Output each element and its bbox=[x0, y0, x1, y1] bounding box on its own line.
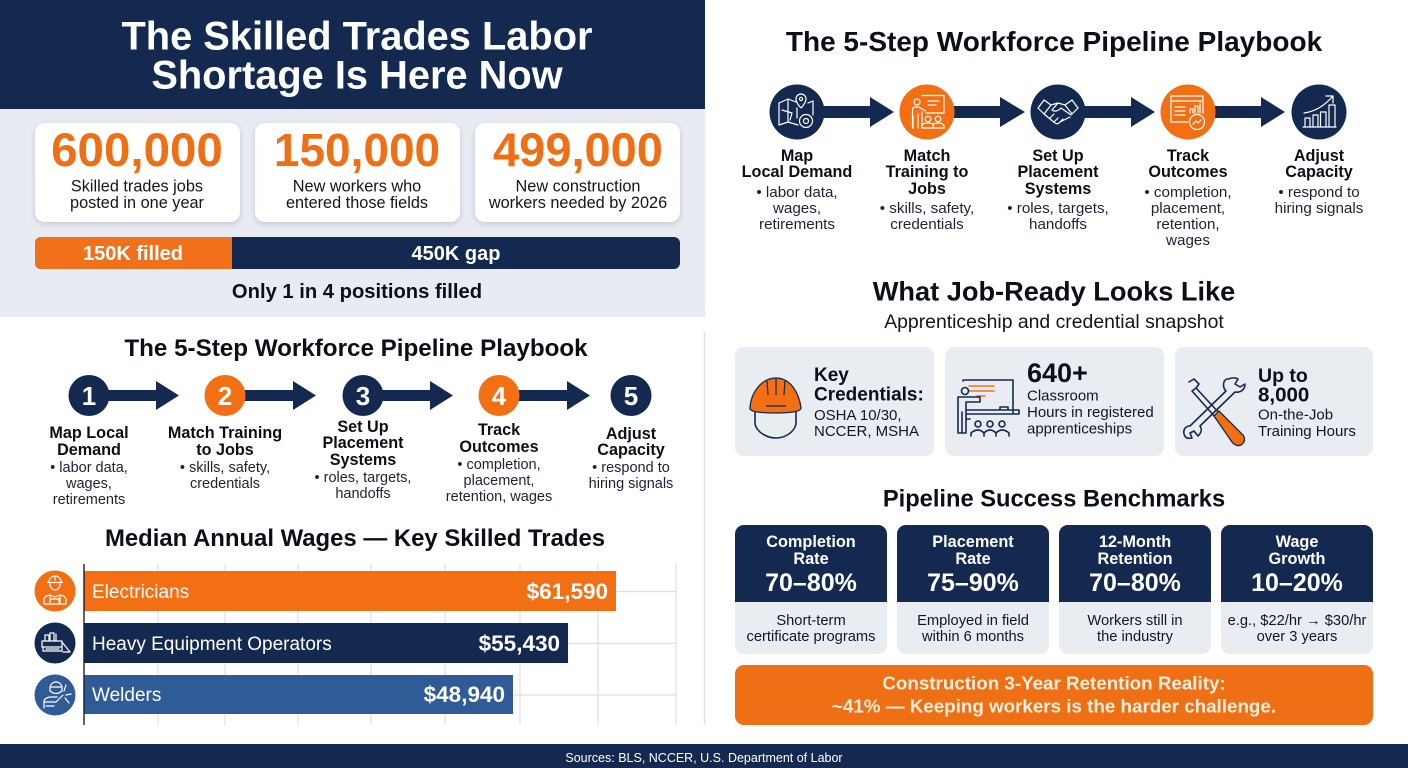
step 1: map local demand bbox=[742, 84, 852, 233]
step 3 bbox=[315, 375, 411, 502]
caption: positions filled: Only 1 in 4 positions filled bbox=[232, 281, 482, 303]
benchmark: 12-month retention: Workers still in bbox=[1087, 613, 1183, 629]
stat card: jobs posted: Skilled trades jobs bbox=[71, 178, 203, 196]
arrow 3 bbox=[379, 381, 453, 410]
arrow 1 bbox=[105, 381, 179, 410]
stat card: new workers: entered those fields bbox=[286, 194, 428, 212]
card: classroom hours: 640+ bbox=[1027, 358, 1088, 388]
step 4: Track bbox=[478, 421, 521, 439]
step 3: Placement bbox=[323, 434, 404, 452]
step 5: 5 bbox=[624, 381, 638, 411]
arrow 1 bbox=[820, 97, 894, 127]
step 5: adjust capacity: Capacity bbox=[1285, 163, 1353, 181]
step 3: set up placement systems bbox=[1007, 84, 1109, 233]
step 4: • completion, bbox=[457, 457, 541, 473]
progress bar: filled vs gap bbox=[35, 237, 680, 269]
benchmark: completion rate: 70–80% bbox=[765, 569, 857, 597]
stat card: jobs posted: posted in one year bbox=[70, 194, 205, 212]
step 2: Match Training bbox=[168, 424, 282, 442]
stat card: jobs posted: 600,000 bbox=[51, 124, 223, 177]
card: classroom hours bbox=[945, 347, 1164, 456]
icon: welder bbox=[34, 674, 76, 716]
panel: shortage statistics bbox=[0, 109, 705, 317]
benchmark: wage growth: Growth bbox=[1269, 550, 1325, 568]
benchmark: placement rate: 75–90% bbox=[927, 569, 1019, 597]
benchmark: wage growth: over 3 years bbox=[1257, 629, 1337, 645]
icon: growth chart bbox=[1292, 84, 1346, 140]
benchmark: completion rate: Short-term bbox=[776, 613, 846, 629]
step 1: map local demand: retirements bbox=[759, 216, 835, 233]
bar: electricians: Electricians bbox=[92, 582, 189, 603]
step 2 bbox=[168, 375, 282, 492]
bar: electricians: $61,590 bbox=[527, 579, 608, 604]
title bbox=[121, 14, 593, 98]
step 3: • roles, targets, bbox=[315, 470, 411, 486]
step 1: • labor data, bbox=[50, 460, 128, 476]
step 4: track outcomes: retention, bbox=[1156, 216, 1220, 233]
icon: trainer bbox=[900, 84, 954, 140]
stat card: new workers bbox=[255, 123, 460, 222]
subtitle: job-ready: Apprenticeship and credential snapshot bbox=[884, 311, 1224, 333]
step 3: set up placement systems: Systems bbox=[1025, 180, 1091, 198]
step 4: track outcomes: Outcomes bbox=[1148, 163, 1228, 181]
icon: dashboard bbox=[1160, 84, 1216, 140]
step 4: Outcomes bbox=[459, 438, 539, 456]
benchmark: completion rate: certificate programs bbox=[747, 629, 875, 645]
step 4: track outcomes: placement, bbox=[1151, 200, 1225, 217]
step 2: match training to jobs: • skills, safety, bbox=[880, 200, 974, 217]
benchmark: 12-month retention: 70–80% bbox=[1089, 569, 1181, 597]
card: key credentials: NCCER, MSHA bbox=[814, 423, 919, 440]
stat card: new workers: 150,000 bbox=[274, 124, 440, 176]
card: key credentials bbox=[735, 347, 934, 456]
step 1 bbox=[49, 375, 129, 508]
benchmark: placement rate: Employed in field bbox=[917, 613, 1029, 629]
benchmark: placement rate: Placement bbox=[932, 533, 1014, 551]
bar: welders: $48,940 bbox=[424, 682, 505, 707]
step 5: adjust capacity: hiring signals bbox=[1275, 200, 1364, 217]
step 2: to Jobs bbox=[196, 441, 254, 459]
left playbook steps bbox=[49, 375, 673, 508]
heading: wages chart: Median Annual Wages — Key Skilled Trades bbox=[105, 525, 605, 552]
benchmark: placement rate: within 6 months bbox=[921, 629, 1024, 645]
step 4 bbox=[446, 375, 552, 505]
card: classroom hours: Hours in registered bbox=[1027, 404, 1154, 421]
arrow 3 bbox=[1080, 97, 1155, 127]
progress bar: filled vs gap: 450K gap bbox=[412, 243, 500, 265]
step 2: 2 bbox=[218, 381, 232, 411]
step 1: map local demand: • labor data, bbox=[756, 184, 838, 201]
step 2: match training to jobs: Jobs bbox=[908, 180, 946, 198]
step 2: match training to jobs bbox=[880, 84, 974, 233]
bar: heavy equipment operators: Heavy Equipment Operators bbox=[92, 634, 332, 655]
benchmark: 12-month retention: 12-Month bbox=[1099, 533, 1171, 551]
title: Shortage Is Here Now bbox=[151, 54, 564, 98]
stat card: new workers: New workers who bbox=[293, 178, 421, 196]
step 3: set up placement systems: Placement bbox=[1018, 163, 1099, 181]
arrow 4 bbox=[515, 381, 590, 410]
card: on-the-job training: 8,000 bbox=[1258, 384, 1309, 407]
arrow 4 bbox=[1210, 97, 1285, 127]
step 3: Set Up bbox=[337, 418, 389, 436]
card: on-the-job training: On-the-Job bbox=[1258, 406, 1333, 424]
card: key credentials: Key bbox=[814, 365, 849, 386]
benchmark: completion rate: Rate bbox=[793, 550, 829, 568]
bar: heavy equipment operators: $55,430 bbox=[479, 631, 560, 656]
step 5: adjust capacity: • respond to bbox=[1278, 184, 1360, 201]
benchmark: 12-month retention bbox=[1059, 525, 1211, 654]
stat card: construction workers needed: 499,000 bbox=[493, 123, 663, 176]
icon: classroom bbox=[958, 380, 1019, 436]
step 3: set up placement systems: Set Up bbox=[1032, 147, 1084, 165]
bar: heavy equipment operators bbox=[84, 623, 568, 663]
footer: sources bbox=[0, 744, 1408, 768]
callout: retention reality: ~41% — Keeping workers is the harder challenge. bbox=[832, 696, 1276, 716]
arrow 2 bbox=[950, 97, 1025, 127]
stat card: jobs posted bbox=[35, 123, 240, 222]
step 1: 1 bbox=[82, 381, 96, 411]
icon: handshake bbox=[1030, 84, 1086, 140]
benchmark: 12-month retention: Retention bbox=[1097, 550, 1173, 568]
arrow 2 bbox=[241, 381, 316, 410]
card: on-the-job training: Training Hours bbox=[1258, 423, 1356, 440]
step 3: Systems bbox=[330, 451, 396, 469]
step 2: match training to jobs: credentials bbox=[890, 216, 964, 233]
icon: hard hat head bbox=[750, 378, 801, 438]
step 2: credentials bbox=[190, 476, 260, 492]
benchmark: 12-month retention: the industry bbox=[1097, 629, 1174, 645]
bar chart: median wages bbox=[34, 564, 676, 725]
footer: sources: Sources: BLS, NCCER, U.S. Department of Labor bbox=[565, 751, 843, 765]
step 4: track outcomes: wages bbox=[1165, 232, 1210, 249]
heading: left playbook: The 5-Step Workforce Pipeline Playbook bbox=[124, 335, 588, 362]
right playbook steps bbox=[742, 84, 1364, 249]
progress bar: filled vs gap: 150K filled bbox=[83, 243, 183, 265]
title: The Skilled Trades Labor bbox=[121, 14, 593, 58]
heading: benchmarks: Pipeline Success Benchmarks bbox=[883, 486, 1225, 512]
step 5: adjust capacity bbox=[1275, 84, 1364, 217]
step 1: retirements bbox=[53, 492, 125, 508]
bar: welders bbox=[84, 675, 513, 714]
stat card: construction workers needed: New construction bbox=[516, 178, 640, 196]
icon: wrench and screwdriver bbox=[1184, 378, 1245, 446]
card: on-the-job training bbox=[1175, 347, 1373, 456]
step 4: 4 bbox=[492, 381, 507, 411]
card: classroom hours: Classroom bbox=[1027, 388, 1099, 404]
step 1: map local demand: wages, bbox=[772, 200, 821, 217]
benchmark: placement rate: Rate bbox=[955, 550, 991, 568]
step 1: map local demand: Map bbox=[781, 147, 813, 165]
step 1: map local demand: Local Demand bbox=[742, 163, 852, 181]
benchmark: completion rate bbox=[735, 525, 887, 654]
benchmark: wage growth bbox=[1221, 525, 1373, 654]
step 5 bbox=[589, 375, 673, 492]
benchmark: placement rate bbox=[897, 525, 1049, 654]
step 1: Demand bbox=[57, 441, 121, 459]
step 5: Adjust bbox=[606, 425, 657, 443]
step 5: Capacity bbox=[597, 441, 665, 459]
benchmark: wage growth: Wage bbox=[1276, 533, 1318, 551]
divider bbox=[704, 332, 706, 725]
card: on-the-job training: Up to bbox=[1258, 365, 1308, 387]
step 3: set up placement systems: handoffs bbox=[1029, 216, 1087, 233]
card: key credentials: OSHA 10/30, bbox=[814, 407, 902, 424]
step 1: Map Local bbox=[49, 424, 129, 442]
step 2: • skills, safety, bbox=[180, 460, 270, 476]
card: key credentials: Credentials: bbox=[814, 385, 924, 406]
icon: electrician bbox=[34, 570, 76, 612]
header banner bbox=[0, 0, 705, 109]
step 3: set up placement systems: • roles, targets, bbox=[1007, 200, 1109, 217]
card: classroom hours: apprenticeships bbox=[1027, 420, 1132, 438]
step 3: handoffs bbox=[335, 486, 391, 502]
step 1: wages, bbox=[65, 476, 112, 492]
benchmark: wage growth: e.g., $22/hr → $30/hr bbox=[1228, 613, 1367, 629]
benchmark: wage growth: 10–20% bbox=[1251, 569, 1343, 597]
benchmark: completion rate: Completion bbox=[766, 533, 856, 551]
callout: retention reality bbox=[735, 665, 1373, 725]
step 5: hiring signals bbox=[589, 476, 673, 492]
bar: electricians bbox=[84, 571, 616, 611]
heading: right playbook: The 5-Step Workforce Pipeline Playbook bbox=[786, 26, 1323, 57]
callout: retention reality: Construction 3-Year Retention Reality: bbox=[882, 672, 1226, 694]
icon: map bbox=[770, 84, 824, 140]
step 4: track outcomes bbox=[1144, 84, 1232, 249]
heading: job-ready: What Job-Ready Looks Like bbox=[873, 276, 1235, 306]
step 2: match training to jobs: Match bbox=[904, 147, 950, 165]
bar: welders: Welders bbox=[92, 685, 161, 706]
step 4: placement, bbox=[464, 473, 534, 489]
step 5: adjust capacity: Adjust bbox=[1294, 147, 1345, 165]
step 4: track outcomes: • completion, bbox=[1144, 184, 1232, 201]
step 2: match training to jobs: Training to bbox=[886, 163, 968, 181]
step 4: retention, wages bbox=[446, 489, 552, 505]
stat card: construction workers needed: workers needed by 2026 bbox=[488, 194, 667, 212]
step 4: track outcomes: Track bbox=[1167, 147, 1210, 165]
step 3: 3 bbox=[356, 381, 370, 411]
icon: bulldozer bbox=[34, 622, 76, 664]
step 5: • respond to bbox=[592, 460, 670, 476]
stat card: construction workers needed bbox=[475, 123, 680, 222]
